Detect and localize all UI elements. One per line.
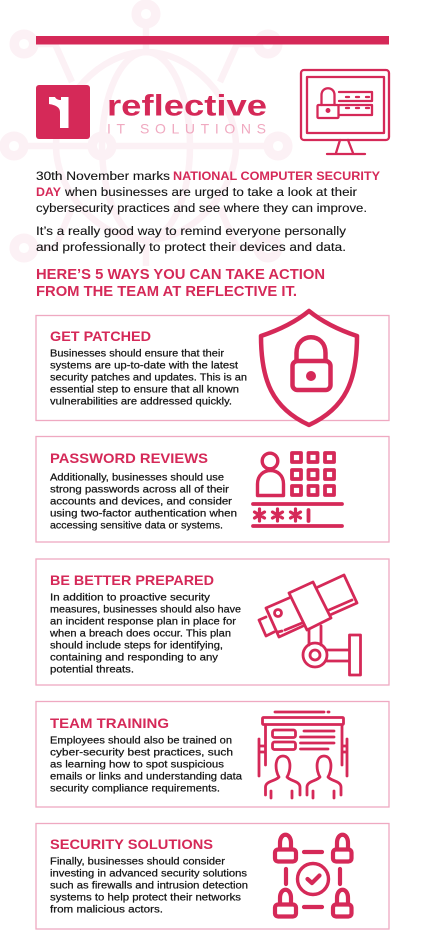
text: get patched body: systems are up-to-date with the latest — [50, 360, 238, 372]
panel: be better prepared — [36, 559, 389, 685]
text: be better prepared body: should include steps for identifying, — [50, 640, 223, 652]
text: be better prepared body: when a breach does occur. This plan — [49, 628, 231, 640]
text: security solutions body: Finally, businesses should consider — [50, 856, 226, 868]
text: team training body: Employees should also be trained on — [50, 736, 232, 746]
text: get patched body: Businesses should ensure that their — [50, 348, 225, 360]
text: password reviews body: accessing sensitive data or systems. — [50, 520, 223, 532]
text: be better prepared body: containing and responding to any — [50, 652, 218, 664]
logo wordmark: reflective — [107, 90, 267, 122]
intro text — [36, 169, 381, 254]
text: security solutions body: investing in advanced security solutions — [50, 868, 247, 880]
text: password reviews body: Additionally, businesses should use — [50, 472, 225, 484]
text: password reviews body — [50, 472, 237, 532]
heading: team training: TEAM TRAINING — [50, 715, 169, 731]
text: security solutions body — [50, 856, 248, 916]
icon: padlocks around check mark — [275, 835, 352, 916]
panel: team training — [36, 702, 389, 807]
text: password reviews body: accounts and devices, and consider — [50, 496, 233, 508]
heading: get patched: GET PATCHED — [50, 328, 151, 344]
text: team training body: cyber-security best practices, such — [50, 748, 233, 758]
text: get patched body: vulnerabilities are addressed quickly. — [50, 396, 232, 408]
icon: two people at a training board — [259, 712, 347, 798]
intro text: cybersecurity practices and see where they can improve. — [36, 201, 367, 215]
text: be better prepared body: measures, businesses should also have — [50, 604, 242, 616]
panel: security solutions — [36, 824, 389, 929]
panel: password reviews — [36, 436, 389, 542]
text: security solutions body: from malicious actors. — [50, 904, 163, 916]
heading: be better prepared: BE BETTER PREPARED — [50, 572, 214, 588]
text: get patched body: essential step to ensure that all known — [50, 384, 239, 396]
icon: shield with padlock — [261, 311, 357, 425]
intro text: when businesses are urged to take a look at their — [64, 185, 357, 199]
text: get patched body — [50, 348, 247, 408]
heading: 5 ways — [36, 267, 325, 300]
text: security solutions body: systems to help protect their networks — [50, 892, 241, 904]
text: be better prepared body: potential threats. — [50, 664, 134, 676]
text: password reviews body: strong passwords across all of their — [50, 484, 230, 496]
logo: reflective IT solutions — [36, 85, 267, 139]
heading: password reviews: PASSWORD REVIEWS — [50, 450, 208, 466]
text: be better prepared body — [49, 592, 242, 676]
background: network globe watermark — [4, 4, 288, 266]
intro text: It’s a really good way to remind everyone personally — [36, 224, 347, 238]
intro text: and professionally to protect their devices and data. — [36, 240, 346, 254]
text: team training body: emails or links and understanding data — [50, 772, 243, 782]
text: team training body: security compliance requirements. — [50, 784, 220, 794]
top bar — [36, 36, 389, 44]
icon: security camera — [259, 575, 360, 675]
intro text: 30th November marks — [36, 169, 170, 183]
heading: 5 ways: HERE’S 5 WAYS YOU CAN TAKE ACTION — [36, 267, 325, 283]
intro text: DAY — [36, 185, 62, 199]
logo mark — [36, 85, 90, 139]
icon: monitor with lock — [301, 70, 389, 154]
text: be better prepared body: an incident response plan in place for — [50, 616, 237, 628]
heading: security solutions: SECURITY SOLUTIONS — [50, 836, 213, 852]
heading: 5 ways: FROM THE TEAM AT REFLECTIVE IT. — [36, 284, 297, 300]
intro text: NATIONAL COMPUTER SECURITY — [173, 169, 381, 183]
panel: get patched — [36, 311, 389, 425]
text: team training body: as learning how to spot suspicious — [50, 760, 224, 770]
text: be better prepared body: In addition to proactive security — [50, 592, 210, 604]
text: password reviews body: using two-factor authentication when — [50, 508, 237, 520]
text: team training body — [50, 736, 243, 794]
text: get patched body: security patches and updates. This is an — [50, 372, 247, 384]
logo tagline: IT SOLUTIONS — [107, 120, 266, 136]
text: security solutions body: such as firewalls and intrusion detection — [50, 880, 248, 892]
icon: user, keypad and masked password — [253, 453, 342, 526]
